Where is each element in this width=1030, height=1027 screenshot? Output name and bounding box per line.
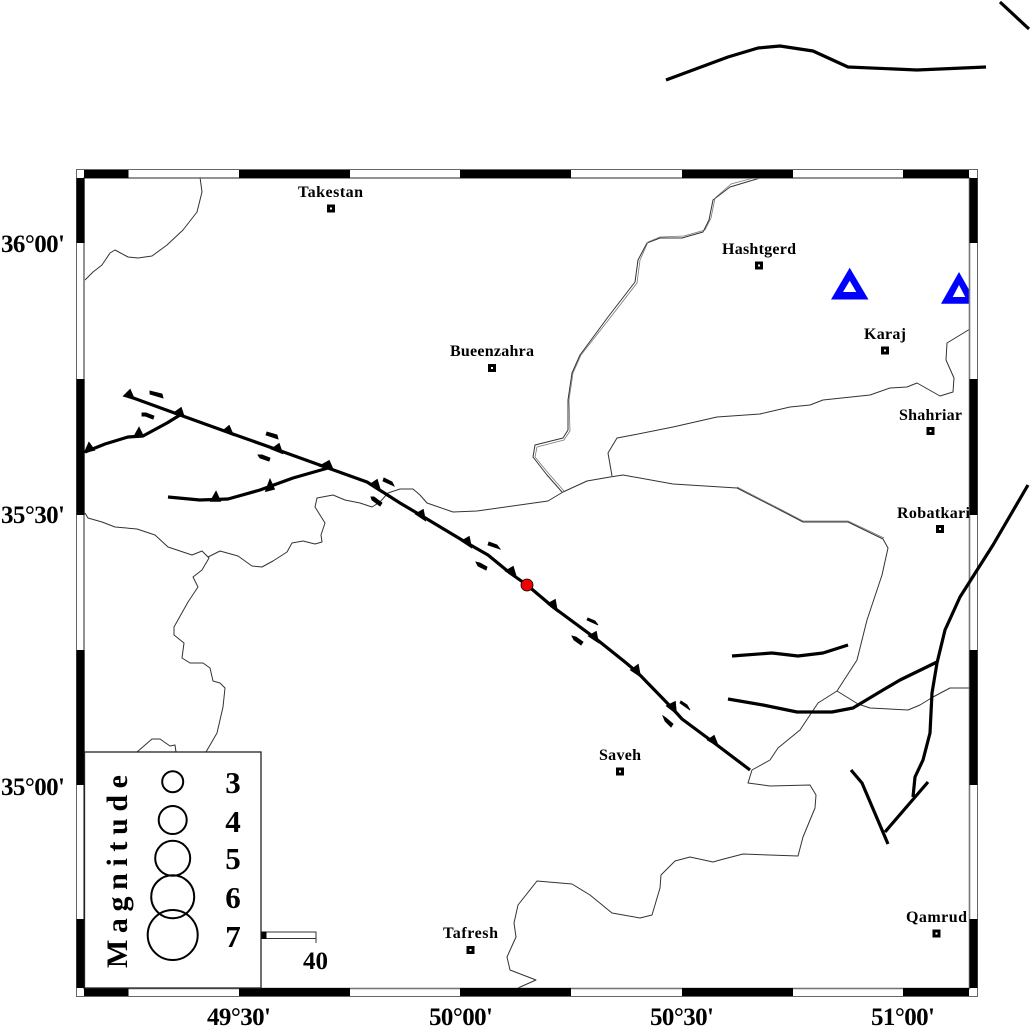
latitude labels: 36°00' [1,231,65,258]
thrust branch south [168,468,328,501]
city: Takestan [298,184,363,212]
main thrust fault [124,390,750,770]
city: Tafresh: Tafresh [443,925,498,942]
city: Bueenzahra: Bueenzahra [450,343,534,360]
thrust branch west [85,415,180,452]
legend numbers: 7 [225,919,241,954]
legend numbers: 6 [225,880,241,915]
scale bar: 40 [303,948,328,975]
legend numbers [225,765,241,954]
longitude labels [207,1004,935,1027]
city: Karaj [864,326,906,354]
city: Saveh [599,747,641,776]
faults east [728,485,1028,844]
station triangle 2 [941,272,969,304]
city: Tafresh [443,925,498,954]
latitude labels [1,231,65,801]
faults top [666,2,1029,80]
city: Takestan: Takestan [298,184,363,201]
city: Karaj: Karaj [864,326,906,343]
city: Shahriar [899,407,962,435]
thrust teeth [124,390,718,746]
city: Saveh: Saveh [599,747,641,764]
latitude labels: 35°30' [1,502,65,529]
legend title: Magnitude [101,775,134,968]
city: Hashtgerd [722,241,796,270]
city: Robatkari [897,505,971,533]
latitude labels: 35°00' [1,774,65,801]
epicentre red dot [521,579,533,591]
legend numbers: 4 [225,804,241,839]
scale bar [262,932,328,975]
station triangle 1 [831,268,868,300]
city: Qamrud: Qamrud [906,909,967,926]
strike-slip arrows north side [150,391,690,710]
magnitude legend [84,752,261,988]
legend numbers: 3 [225,765,241,800]
legend circles [148,771,198,960]
city: Shahriar: Shahriar [899,407,962,424]
strike-slip arrows south side [142,413,673,727]
city: Robatkari: Robatkari [897,505,971,522]
rivers network [85,176,970,988]
legend numbers: 5 [225,841,241,876]
map frame [76,170,978,996]
city: Qamrud [906,909,967,938]
city: Bueenzahra [450,343,534,372]
city: Hashtgerd: Hashtgerd [722,241,796,258]
